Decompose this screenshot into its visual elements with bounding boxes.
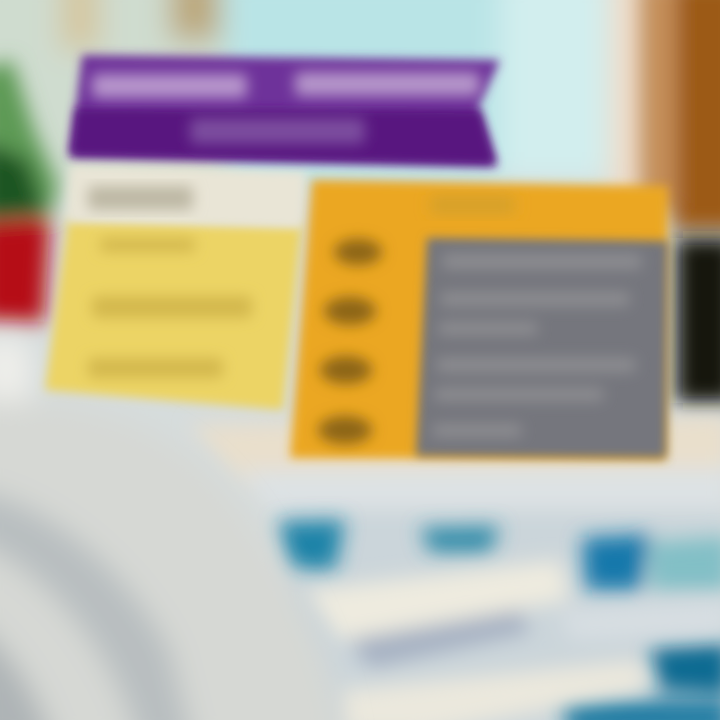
panel: yellow list card bbox=[45, 165, 306, 410]
yellow card header bbox=[66, 165, 306, 228]
foreground cushion bbox=[0, 335, 345, 720]
panel: purple title banner bbox=[70, 55, 500, 165]
grey panel text placeholders bbox=[432, 254, 642, 437]
orange frame bbox=[290, 180, 668, 460]
blue patterned papers bbox=[278, 520, 720, 720]
banner lower band bbox=[70, 108, 496, 165]
desk surface bbox=[190, 415, 720, 720]
potted plant bbox=[0, 60, 58, 322]
curtain: brown right side bbox=[640, 0, 720, 230]
header text placeholder bbox=[88, 186, 193, 210]
orange header text placeholder bbox=[430, 195, 515, 215]
panel: orange and grey table bbox=[290, 180, 668, 460]
yellow card body bbox=[45, 218, 302, 410]
list text placeholders bbox=[88, 238, 252, 378]
infographic board bbox=[45, 55, 668, 460]
row markers bbox=[318, 239, 382, 444]
dark object on right bbox=[676, 238, 720, 403]
white paper sheets bbox=[305, 560, 720, 720]
grey content panel bbox=[416, 238, 668, 458]
title text placeholders bbox=[92, 72, 480, 144]
banner shape bbox=[70, 55, 500, 165]
